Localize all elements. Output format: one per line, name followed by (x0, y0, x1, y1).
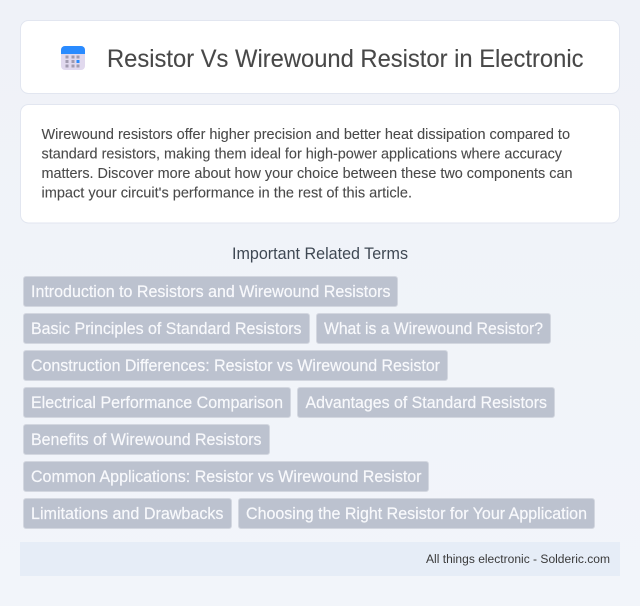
text block: introduction: Wirewound resistors offer higher precision and better heat dissipation compared to (42, 127, 570, 143)
term: common applications (24, 462, 428, 492)
term: limitations: Limitations and Drawbacks (31, 505, 224, 523)
term: construction differences (24, 350, 448, 380)
heading: related terms: Important Related Terms (232, 245, 408, 263)
term: basic principles: Basic Principles of Standard Resistors (31, 320, 302, 338)
term: advantages: Advantages of Standard Resistors (306, 394, 547, 412)
panel: header (20, 20, 620, 94)
term: limitations (24, 498, 232, 528)
term: basic principles (24, 314, 310, 344)
text block: introduction (42, 127, 572, 202)
text block: introduction: standard resistors, making them ideal for high-power applications where accuracy (42, 146, 563, 162)
footer (20, 542, 620, 576)
panel: related terms (24, 276, 594, 528)
term: construction differences: Construction Differences: Resistor vs Wirewound Resistor (31, 357, 441, 375)
term: common applications: Common Applications: Resistor vs Wirewound Resistor (31, 468, 422, 486)
term: benefits (24, 424, 270, 454)
text block: introduction: impact your circuit's performance in the rest of this article. (42, 186, 412, 202)
term: electrical performance (24, 388, 290, 418)
term: advantages (298, 388, 554, 418)
term: what is a wirewound resistor (316, 314, 550, 344)
term: introduction: Introduction to Resistors and Wirewound Resistors (31, 283, 390, 301)
panel: introduction (20, 104, 620, 223)
term: what is a wirewound resistor: What is a Wirewound Resistor? (324, 320, 543, 338)
icon: calendar (61, 46, 85, 70)
term: electrical performance: Electrical Performance Comparison (31, 394, 283, 412)
title: Resistor Vs Wirewound Resistor in Electronic (107, 46, 584, 73)
term: introduction (24, 276, 398, 306)
term: choosing: Choosing the Right Resistor for Your Application (246, 505, 587, 523)
text block: introduction: matters. Discover more about how your choice between these two components can (42, 166, 572, 182)
footer text: All things electronic - Solderic.com (426, 552, 610, 566)
term: benefits: Benefits of Wirewound Resistors (31, 431, 262, 449)
term: choosing (238, 498, 594, 528)
